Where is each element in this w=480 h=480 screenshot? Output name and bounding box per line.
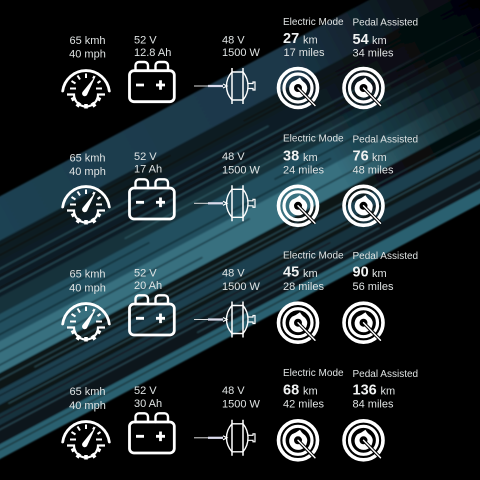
electric mode range: km xyxy=(303,268,318,280)
speed labels: 40 mph xyxy=(69,283,106,295)
motor labels: 48 V xyxy=(222,268,245,280)
speed labels: 65 kmh xyxy=(69,153,106,165)
battery labels: 52 V xyxy=(134,385,157,397)
pedal assisted range: 48 miles xyxy=(352,165,394,177)
pedal assisted range: 56 miles xyxy=(352,281,394,293)
icon: hub motor xyxy=(194,68,255,104)
motor labels xyxy=(222,385,261,411)
motor labels xyxy=(222,268,261,293)
pedal assisted range: 84 miles xyxy=(352,399,394,411)
icon: pedal range target xyxy=(344,421,383,460)
motor labels xyxy=(222,34,261,59)
electric mode range xyxy=(283,134,344,177)
pedal assisted range: km xyxy=(372,152,387,164)
pedal assisted range: km xyxy=(372,268,387,280)
battery labels xyxy=(134,268,162,292)
battery labels: 30 Ah xyxy=(134,398,162,410)
electric mode range: 68 xyxy=(283,382,299,398)
pedal assisted range: km xyxy=(372,35,387,47)
electric mode range: km xyxy=(303,152,318,164)
pedal assisted range: 34 miles xyxy=(352,48,394,60)
icon: speedometer xyxy=(63,304,109,342)
battery labels: 52 V xyxy=(134,268,157,280)
battery labels xyxy=(134,385,162,410)
battery labels: 17 Ah xyxy=(134,164,162,176)
battery labels: 52 V xyxy=(134,151,157,163)
icon: electric range target xyxy=(278,303,318,342)
speed labels: 40 mph xyxy=(69,48,106,60)
battery labels xyxy=(134,151,162,176)
speed labels: 65 kmh xyxy=(69,386,106,398)
speed labels xyxy=(69,35,106,60)
electric mode range: 45 xyxy=(283,265,299,281)
pedal assisted range: 136 xyxy=(352,382,377,398)
speed labels: 40 mph xyxy=(69,400,106,412)
pedal assisted range: 54 xyxy=(352,32,369,48)
pedal assisted range xyxy=(352,135,418,177)
speed labels: 65 kmh xyxy=(69,35,106,47)
electric mode range: Electric Mode xyxy=(283,368,344,379)
electric mode range: km xyxy=(303,34,318,46)
motor labels: 1500 W xyxy=(222,47,261,59)
pedal assisted range: 90 xyxy=(352,265,369,281)
battery labels: 12.8 Ah xyxy=(134,47,171,59)
speed labels xyxy=(69,386,106,412)
speed labels: 40 mph xyxy=(69,166,106,178)
icon: hub motor xyxy=(194,185,255,221)
speed labels: 65 kmh xyxy=(69,268,106,280)
pedal assisted range xyxy=(352,251,418,293)
pedal assisted range xyxy=(352,369,418,411)
electric mode range: 38 xyxy=(283,149,299,165)
row 1 xyxy=(63,17,418,108)
electric mode range xyxy=(283,17,344,59)
icon: battery xyxy=(130,179,174,219)
icon: battery xyxy=(130,62,174,102)
motor labels: 1500 W xyxy=(222,399,261,411)
icon: pedal range target xyxy=(344,68,383,108)
electric mode range: 27 xyxy=(283,31,299,47)
electric mode range: 17 miles xyxy=(284,47,325,59)
motor labels: 48 V xyxy=(222,385,245,397)
motor labels: 48 V xyxy=(222,34,245,46)
row 3 xyxy=(63,250,418,342)
icon: pedal range target xyxy=(344,186,383,225)
electric mode range: 28 miles xyxy=(283,281,324,293)
row 4 xyxy=(63,368,418,460)
battery labels: 20 Ah xyxy=(134,280,162,292)
icon: battery xyxy=(130,295,174,335)
motor labels: 48 V xyxy=(222,151,245,163)
motor labels: 1500 W xyxy=(222,165,261,177)
icon: speedometer xyxy=(63,422,109,460)
pedal assisted range: Pedal Assisted xyxy=(352,251,418,262)
electric mode range: 42 miles xyxy=(283,399,324,411)
icon: electric range target xyxy=(278,421,318,460)
pedal assisted range: km xyxy=(380,386,395,398)
electric mode range: km xyxy=(303,386,318,398)
pedal assisted range: Pedal Assisted xyxy=(352,369,418,380)
battery labels xyxy=(134,34,171,59)
electric mode range: Electric Mode xyxy=(283,134,344,145)
battery labels: 52 V xyxy=(134,34,157,46)
icon: hub motor xyxy=(194,302,255,338)
icon: speedometer xyxy=(63,71,109,108)
icon: electric range target xyxy=(278,68,318,108)
electric mode range: Electric Mode xyxy=(283,17,344,28)
motor labels xyxy=(222,151,261,177)
pedal assisted range xyxy=(352,18,418,60)
speed labels xyxy=(69,268,106,295)
icon: battery xyxy=(130,413,174,453)
pedal assisted range: 76 xyxy=(352,149,369,165)
icon: hub motor xyxy=(194,420,255,456)
electric mode range xyxy=(283,250,344,293)
icon: electric range target xyxy=(278,186,318,225)
icon: pedal range target xyxy=(344,303,383,342)
motor labels: 1500 W xyxy=(222,281,261,293)
speed labels xyxy=(69,153,106,178)
pedal assisted range: Pedal Assisted xyxy=(352,18,418,29)
electric mode range: Electric Mode xyxy=(283,250,344,261)
electric mode range xyxy=(283,368,344,411)
row 2 xyxy=(63,134,418,225)
pedal assisted range: Pedal Assisted xyxy=(352,135,418,146)
icon: speedometer xyxy=(63,187,109,224)
electric mode range: 24 miles xyxy=(283,165,324,177)
